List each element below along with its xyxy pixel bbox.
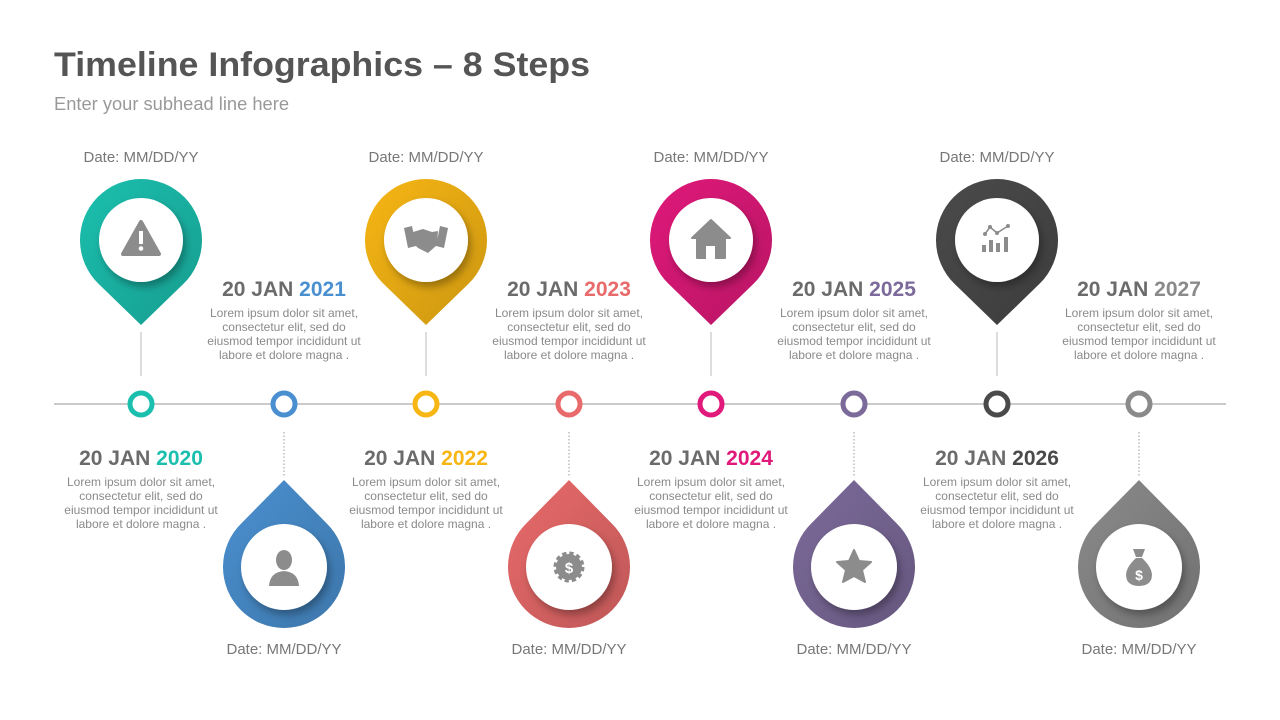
- step 2: 2021: Date: MM/DD/YY: [226, 641, 342, 658]
- step 7: 2026: Lorem ipsum dolor sit amet,: [923, 475, 1071, 489]
- step 5: 2024: eiusmod tempor incididunt ut: [634, 503, 788, 517]
- step 6: 2025: eiusmod tempor incididunt ut: [777, 334, 931, 348]
- icon: money bag: $: [1135, 567, 1143, 583]
- icon: person: [269, 550, 299, 586]
- step 4: 2023: labore et dolore magna .: [504, 348, 634, 362]
- step 5: 2024: Lorem ipsum dolor sit amet,: [637, 475, 785, 489]
- step 1: 2020: eiusmod tempor incididunt ut: [64, 503, 218, 517]
- step 7: 2026: [920, 149, 1074, 531]
- step 4: 2023: eiusmod tempor incididunt ut: [492, 334, 646, 348]
- step 4: 2023: Date: MM/DD/YY: [511, 641, 627, 658]
- step 2: 2021: 20 JAN 2021: [222, 278, 346, 301]
- step 6: 2025: consectetur elit, sed do: [792, 320, 916, 334]
- icon: house: [692, 220, 730, 259]
- step 7: 2026: eiusmod tempor incididunt ut: [920, 503, 1074, 517]
- step 5: 2024: Date: MM/DD/YY: [653, 149, 769, 166]
- icon: star: [837, 550, 871, 582]
- step 8: 2027: eiusmod tempor incididunt ut: [1062, 334, 1216, 348]
- step 3: 2022: eiusmod tempor incididunt ut: [349, 503, 503, 517]
- step 7: 2026: consectetur elit, sed do: [935, 489, 1059, 503]
- step 2: 2021: Lorem ipsum dolor sit amet,: [210, 306, 358, 320]
- step 3: 2022: Lorem ipsum dolor sit amet,: [352, 475, 500, 489]
- icon: money bag: [1126, 549, 1152, 586]
- step 7: 2026: 20 JAN 2026: [935, 447, 1059, 470]
- step 3: 2022: [349, 149, 503, 531]
- icon: warning: [123, 222, 159, 254]
- step 1: 2020: Lorem ipsum dolor sit amet,: [67, 475, 215, 489]
- step 4: 2023: consectetur elit, sed do: [507, 320, 631, 334]
- step 3: 2022: consectetur elit, sed do: [364, 489, 488, 503]
- step 8: 2027: [1062, 278, 1216, 658]
- step 2: 2021: [207, 278, 361, 658]
- step 6: 2025: Lorem ipsum dolor sit amet,: [780, 306, 928, 320]
- subhead: Enter your subhead line here: [54, 94, 289, 114]
- step 1: 2020: labore et dolore magna .: [76, 517, 206, 531]
- step 8: 2027: labore et dolore magna .: [1074, 348, 1204, 362]
- step 8: 2027: consectetur elit, sed do: [1077, 320, 1201, 334]
- step 8: 2027: Lorem ipsum dolor sit amet,: [1065, 306, 1213, 320]
- step 7: 2026: labore et dolore magna .: [932, 517, 1062, 531]
- step 2: 2021: eiusmod tempor incididunt ut: [207, 334, 361, 348]
- step 5: 2024: [634, 149, 788, 531]
- step 4: 2023: Lorem ipsum dolor sit amet,: [495, 306, 643, 320]
- step 4: 2023: 20 JAN 2023: [507, 278, 631, 301]
- step 6: 2025: 20 JAN 2025: [792, 278, 916, 301]
- step 8: 2027: 20 JAN 2027: [1077, 278, 1201, 301]
- step 2: 2021: labore et dolore magna .: [219, 348, 349, 362]
- timeline axis: [54, 403, 1226, 405]
- icon: gear dollar: $: [565, 560, 574, 577]
- step 5: 2024: labore et dolore magna .: [646, 517, 776, 531]
- step 5: 2024: 20 JAN 2024: [649, 447, 773, 470]
- step 1: 2020: 20 JAN 2020: [79, 447, 203, 470]
- step 4: 2023: [492, 278, 646, 658]
- step 6: 2025: [777, 278, 931, 658]
- icon: chart: [982, 224, 1010, 252]
- title: Timeline Infographics – 8 Steps: [54, 46, 590, 84]
- step 6: 2025: Date: MM/DD/YY: [796, 641, 912, 658]
- step 3: 2022: 20 JAN 2022: [364, 447, 488, 470]
- step 1: 2020: consectetur elit, sed do: [79, 489, 203, 503]
- step 7: 2026: Date: MM/DD/YY: [939, 149, 1055, 166]
- step 1: 2020: Date: MM/DD/YY: [83, 149, 199, 166]
- icon: handshake: [404, 226, 448, 253]
- step 6: 2025: labore et dolore magna .: [789, 348, 919, 362]
- icon: gear dollar: [556, 554, 582, 580]
- step 3: 2022: labore et dolore magna .: [361, 517, 491, 531]
- step 1: 2020: [64, 149, 218, 531]
- step 2: 2021: consectetur elit, sed do: [222, 320, 346, 334]
- step 5: 2024: consectetur elit, sed do: [649, 489, 773, 503]
- step 8: 2027: Date: MM/DD/YY: [1081, 641, 1197, 658]
- step 3: 2022: Date: MM/DD/YY: [368, 149, 484, 166]
